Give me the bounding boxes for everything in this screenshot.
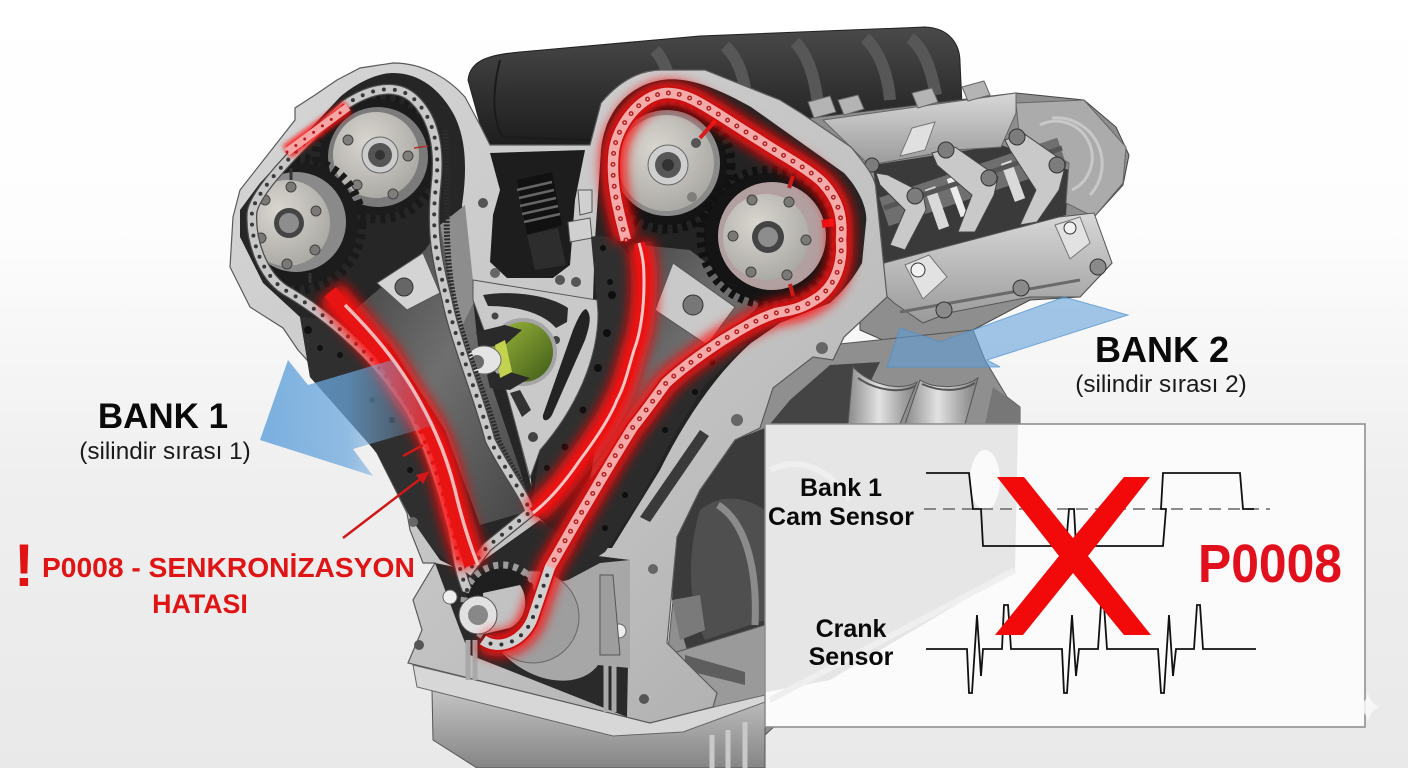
plate slot and hole xyxy=(640,342,828,522)
label: bank 1 cam sensor: Cam Sensor xyxy=(768,503,914,531)
error message xyxy=(14,532,415,619)
label: bank 1: (silindir sırası 1) xyxy=(79,438,251,465)
lower right cam gear xyxy=(701,170,836,304)
error message: HATASI xyxy=(152,589,248,619)
head bolts xyxy=(808,81,990,118)
error message: ! xyxy=(14,532,34,599)
cam valley xyxy=(873,145,1069,265)
right timing case interior xyxy=(530,79,866,578)
label: bank 1 xyxy=(79,397,251,465)
lower rail xyxy=(880,213,1112,323)
valve cover xyxy=(468,27,962,170)
right guide shoe xyxy=(533,236,638,512)
red cross mark xyxy=(995,477,1151,635)
panel: sensor signal chart xyxy=(765,424,1365,727)
cam caps xyxy=(876,133,1066,250)
left red highlights xyxy=(287,107,478,565)
label: crank sensor: Sensor xyxy=(809,643,894,671)
label: bank 2: (silindir sırası 2) xyxy=(1075,371,1247,398)
arrow: bank 1 xyxy=(260,360,435,476)
label: bank 2 xyxy=(1075,329,1247,398)
upper left cam gear xyxy=(316,95,440,219)
cylinder head and camshaft xyxy=(808,81,1129,345)
left timing case interior xyxy=(240,73,535,575)
lower block and pistons xyxy=(660,330,1020,735)
watermark sparkle xyxy=(1356,692,1380,722)
crank plate and sprocket xyxy=(408,517,658,717)
centre opening with tensioner spring xyxy=(478,150,592,287)
crank sensor waveform xyxy=(926,605,1256,693)
crankshaft xyxy=(672,428,765,660)
left timing chain xyxy=(252,89,536,590)
top rail xyxy=(823,93,1016,165)
error message: P0008 - SENKRONİZASYON xyxy=(42,551,415,583)
camshaft xyxy=(884,152,1062,212)
front timing cover plate xyxy=(230,63,887,723)
lower left cam gear xyxy=(257,154,366,294)
engine illustration xyxy=(230,27,1129,768)
left guide shoe xyxy=(300,317,465,575)
oil pan xyxy=(413,665,765,768)
label: bank 2: BANK 2 xyxy=(1095,329,1229,370)
centre web with oil control solenoid xyxy=(467,280,598,478)
label: bank 1 cam sensor: Bank 1 xyxy=(800,474,882,502)
right bracket xyxy=(655,263,735,345)
cam sensor waveform xyxy=(924,473,1270,546)
red callout pointer xyxy=(343,445,430,538)
upper right cam gear xyxy=(603,101,731,229)
end plate xyxy=(1016,100,1126,217)
right outer shoe xyxy=(565,343,748,578)
label: crank sensor xyxy=(809,615,894,671)
arrow: bank 2 xyxy=(887,297,1128,367)
right timing chain highlighted red xyxy=(483,93,841,645)
label: crank sensor: Crank xyxy=(816,615,887,643)
fault code: P0008 xyxy=(1198,534,1342,594)
left bracket xyxy=(377,253,440,310)
label: bank 1: BANK 1 xyxy=(98,397,228,436)
label: bank 1 cam sensor xyxy=(768,474,914,531)
